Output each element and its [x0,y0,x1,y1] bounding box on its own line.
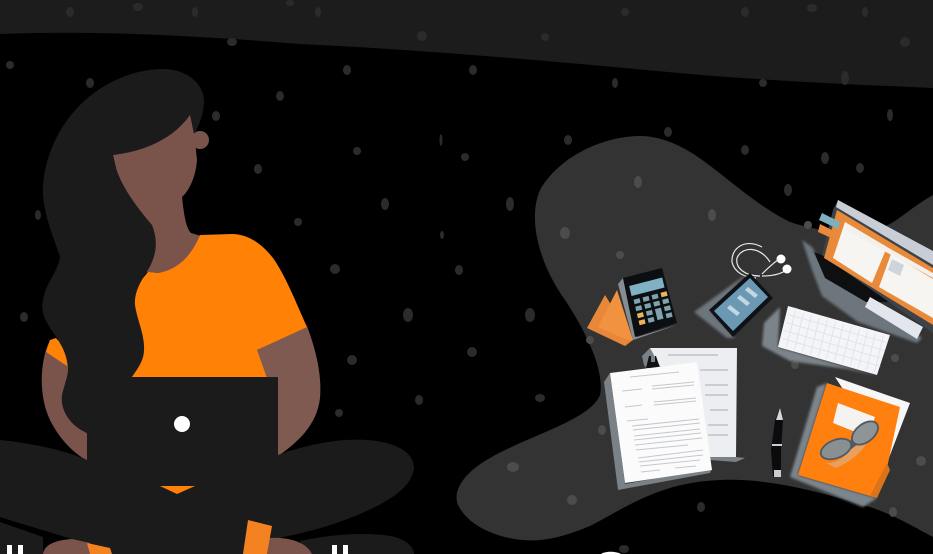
pen [771,408,783,477]
glasses [818,417,882,468]
blob speckles [507,176,926,517]
left cuff [87,543,112,554]
hair [42,69,204,440]
legs [0,440,414,554]
lower right leg [300,534,414,554]
monitor shadow [802,240,922,343]
woman figure [0,69,414,554]
screen frame [824,210,933,325]
lower speckles on black [619,502,705,553]
t-shirt [125,234,307,378]
back arm left [42,340,110,462]
top wavy band [0,0,933,88]
laptop logo dot [174,416,190,432]
note in folder [833,403,875,437]
calculator [618,268,677,340]
right arm [250,326,320,456]
lower left leg [0,522,43,554]
keyboard [762,306,890,376]
neck and face [113,113,201,273]
background speckles [6,0,910,417]
right cuff [243,520,272,554]
document back [642,348,745,462]
dark blob behind desk items [457,136,933,540]
white marks at bottom [7,545,348,554]
document front [604,362,712,490]
sticky notes [587,290,633,346]
tablet [694,273,773,338]
orange sleeve left [46,338,67,366]
shirt glimpse under laptop [160,486,195,494]
right foot skin [266,538,312,554]
laptop [87,377,278,492]
ear [191,131,209,149]
earphones [732,244,792,278]
left foot skin [43,539,90,554]
monitor stand [865,297,923,339]
monitor bezel [822,200,933,333]
binder clip [646,356,660,368]
white partial mark at bottom [601,552,621,554]
bookmark tabs [819,213,840,229]
folder [790,377,910,507]
monitor [802,200,933,343]
